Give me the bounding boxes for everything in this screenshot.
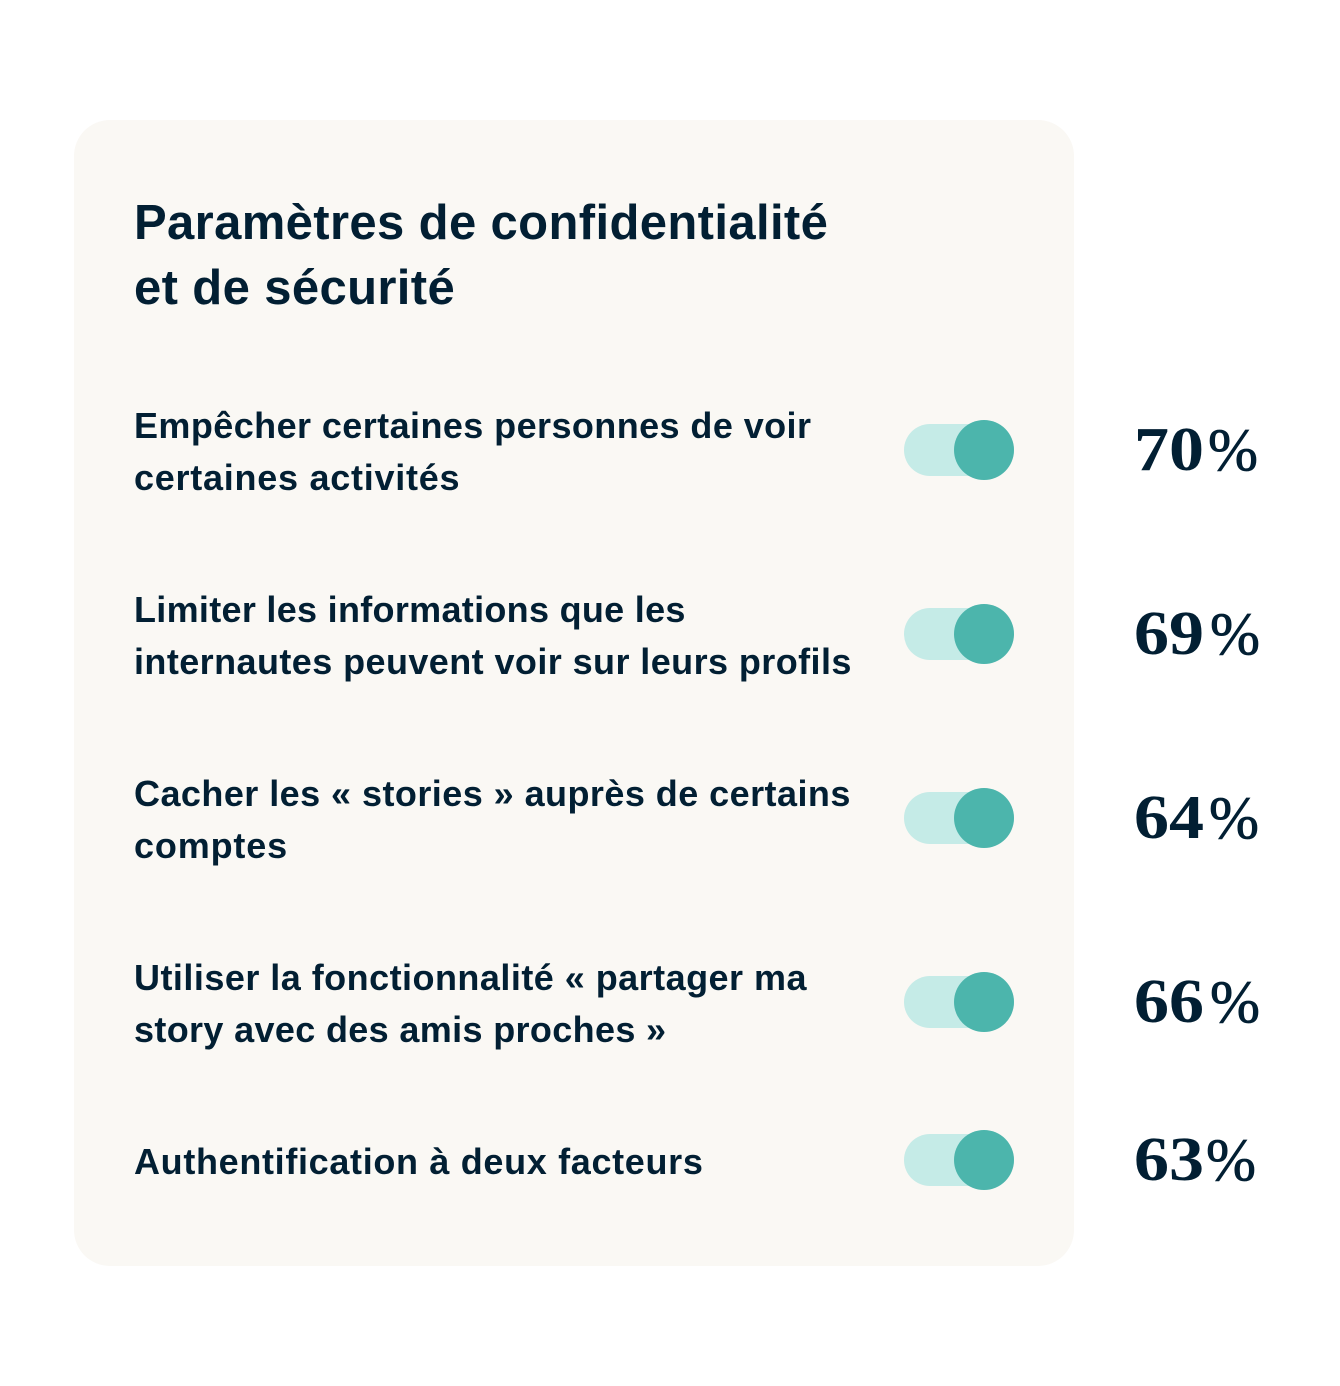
percentage: row 2: 69 xyxy=(1134,600,1204,668)
icon: toggle row 2 xyxy=(904,604,1014,664)
label: row 3: comptes xyxy=(134,825,288,866)
label: row 1 xyxy=(134,405,811,498)
percentage: row 3: % xyxy=(1209,785,1259,851)
percentage: row 5 xyxy=(1134,1126,1256,1194)
label: row 2: internautes peuvent voir sur leurs profils xyxy=(134,641,852,682)
percentage: row 1: % xyxy=(1208,417,1258,483)
percentage: row 1: 70 xyxy=(1134,416,1204,484)
title: et de sécurité xyxy=(134,261,455,315)
percentage: row 2: % xyxy=(1210,601,1260,667)
percentage: row 3: 64 xyxy=(1134,784,1204,852)
title: Paramètres de confidentialité xyxy=(134,196,828,250)
icon: toggle row 3 xyxy=(904,788,1014,848)
label: row 4 xyxy=(134,957,807,1050)
label: row 1: certaines activités xyxy=(134,457,460,498)
label: row 5: Authentification à deux facteurs xyxy=(134,1141,704,1182)
icon: toggle row 1 xyxy=(904,420,1014,480)
label: row 2: Limiter les informations que les xyxy=(134,589,686,630)
icon: toggle row 5 xyxy=(904,1130,1014,1190)
percentage: row 4 xyxy=(1134,968,1260,1036)
title xyxy=(134,196,828,315)
percentage: row 3 xyxy=(1134,784,1259,852)
percentage: row 4: % xyxy=(1210,969,1260,1035)
percentage: row 2 xyxy=(1134,600,1260,668)
label: row 4: Utiliser la fonctionnalité « partager ma xyxy=(134,957,807,998)
percentage: row 5: 63 xyxy=(1134,1126,1204,1194)
percentage: row 5: % xyxy=(1206,1127,1256,1193)
panel: privacy and security settings xyxy=(74,120,1074,1266)
label: row 2 xyxy=(134,589,852,682)
label: row 4: story avec des amis proches » xyxy=(134,1009,666,1050)
icon: toggle row 4 xyxy=(904,972,1014,1032)
label: row 3 xyxy=(134,773,851,866)
label: row 1: Empêcher certaines personnes de voir xyxy=(134,405,811,446)
percentage: row 1 xyxy=(1134,416,1258,484)
label: row 3: Cacher les « stories » auprès de certains xyxy=(134,773,851,814)
percentage: row 4: 66 xyxy=(1134,968,1204,1036)
